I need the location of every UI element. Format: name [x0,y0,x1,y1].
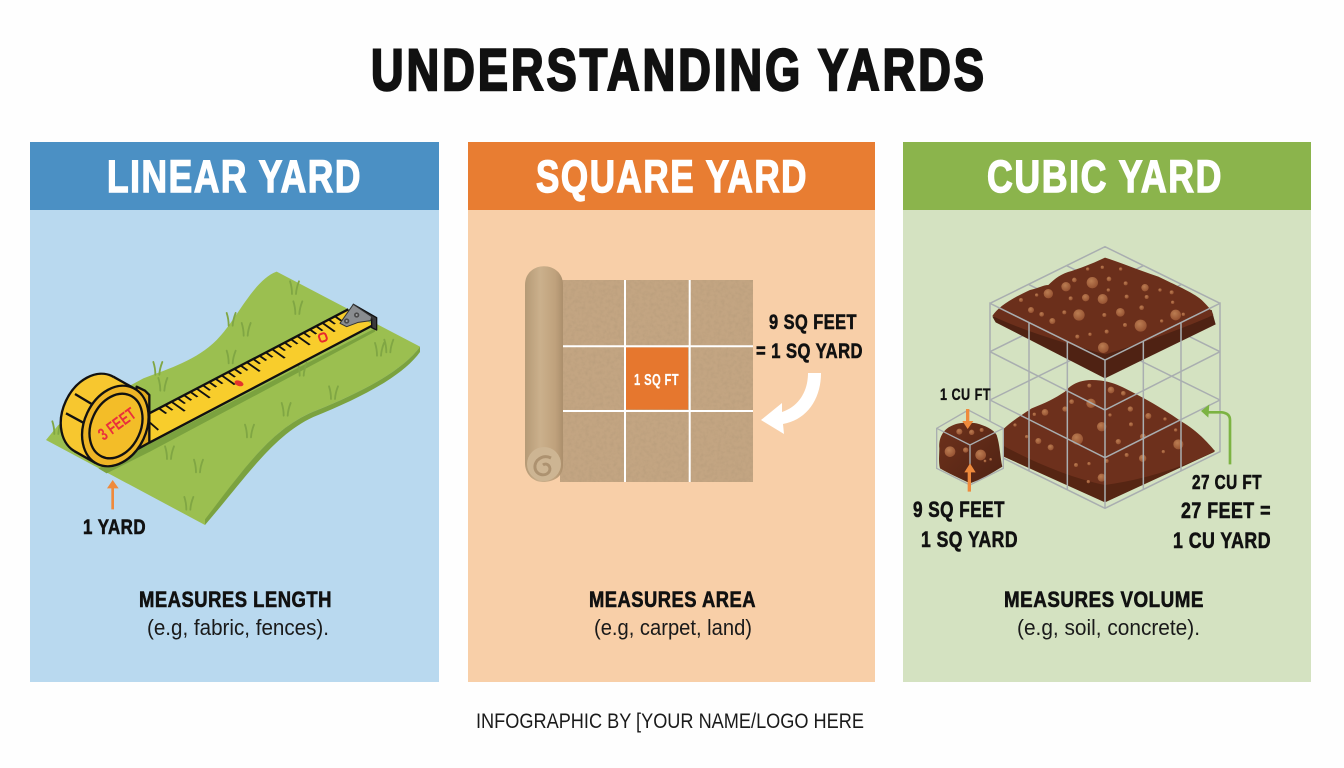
label: 9 sq feet: 9 SQ FEET [769,311,857,334]
upper soil layer [992,258,1216,378]
label: 27 cu ft: 27 CU FT [1192,472,1262,494]
caption: examples: (e.g, fabric, fences). [147,615,329,640]
tape case [48,363,161,477]
label: 1 cu yard: 1 CU YARD [1173,528,1271,553]
arrow: orange down [962,409,973,429]
label: 1 sq yard: 1 SQ YARD [921,527,1018,552]
label: 27 feet equals: 27 FEET = [1181,498,1271,523]
label: equals 1 sq yard: = 1 SQ YARD [756,340,863,363]
wire cube front [990,303,1220,508]
caption: measures volume: MEASURES VOLUME [1004,587,1204,612]
carpet roll end [525,266,563,482]
header: square yard: SQUARE YARD [536,151,808,202]
header: square yard [468,142,875,210]
label: 1 sq ft: 1 SQ FT [634,372,679,389]
panel: linear yard [30,142,439,682]
panel: cubic yard [903,142,1311,682]
arrow: 1 yard marker [107,480,119,509]
caption: measures length: MEASURES LENGTH [139,587,332,612]
case label: 3 feet: 3 FEET [94,403,140,444]
arrow head: green [1201,404,1209,418]
tape hook [340,304,377,330]
label: 9 sq feet: 9 SQ FEET [913,497,1005,522]
caption: examples: (e.g, soil, concrete). [1017,615,1200,640]
header: linear yard [30,142,439,210]
header: cubic yard [903,142,1311,210]
arrow: orange up [964,463,976,492]
illustration: soil cube [937,247,1230,508]
arrow: curved white [761,373,821,434]
footer credit: INFOGRAPHIC BY [YOUR NAME/LOGO HERE [476,710,864,733]
illustration: tape measure on grass [46,272,420,525]
small soil cube [937,410,1003,485]
tape blade with ticks [149,309,373,443]
grid lines [562,280,753,482]
header: linear yard: LINEAR YARD [107,151,362,202]
title: UNDERSTANDING YARDS [371,38,987,103]
label: 1 yard: 1 YARD [83,516,146,539]
lower soil layer [998,380,1215,502]
caption: examples: (e.g, carpet, land) [594,615,752,640]
highlighted square foot [626,348,688,410]
label: 1 cu ft: 1 CU FT [940,385,991,404]
arrow: green pointer [1205,412,1230,464]
panel: square yard [468,142,875,682]
grass patch [46,272,420,525]
illustration: carpet roll [525,266,753,482]
caption: measures area: MEASURES AREA [589,587,756,612]
wire cube back [990,247,1220,400]
header: cubic yard: CUBIC YARD [987,151,1223,202]
carpet square [560,280,753,482]
